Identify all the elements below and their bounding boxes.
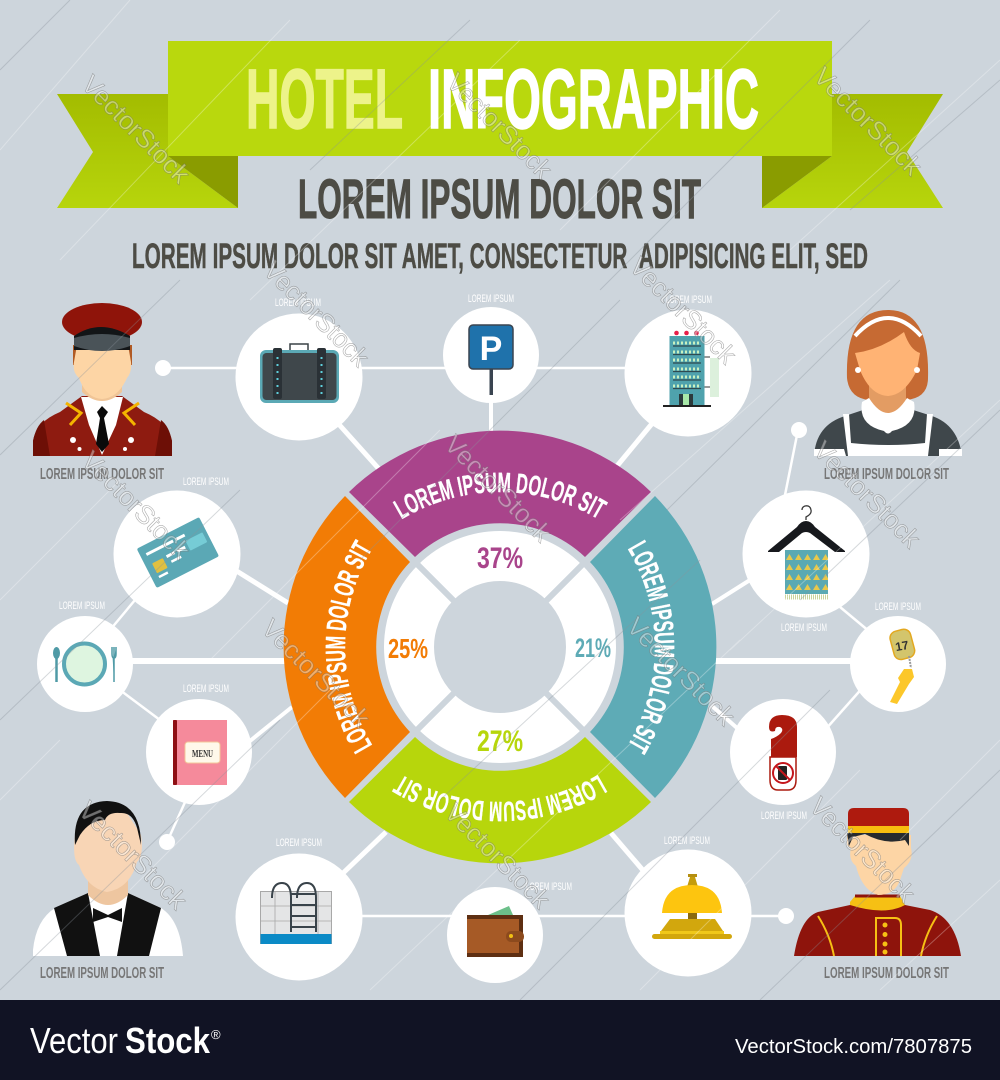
icon circle: pool [236, 854, 362, 980]
ribbon banner [57, 41, 943, 208]
person: bellhop with peaked cap [33, 303, 172, 456]
icon circle: key: 17 [894, 638, 910, 654]
arc label: orange: LOREM IPSUM DOLOR SIT [326, 538, 372, 754]
small icon labels: LOREM IPSUM [59, 600, 105, 612]
VectorStock watermarks [73, 61, 929, 916]
VectorStock watermarks: VectorStock [441, 67, 559, 185]
VectorStock watermarks: VectorStock [439, 429, 558, 549]
person: waiter [33, 801, 183, 956]
icon circle: plate [37, 616, 133, 712]
segment: teal [590, 496, 716, 798]
small icon labels: LOREM IPSUM [468, 293, 514, 305]
icon circle: menu book: MENU [192, 748, 213, 760]
icon circle: bell [624, 850, 752, 976]
icon circle: door hanger [730, 699, 836, 805]
VectorStock watermarks: VectorStock [621, 611, 742, 732]
icon circle: hotel building [624, 310, 752, 436]
icon circle: suitcase [236, 314, 362, 440]
icon circle: parking: P [480, 330, 502, 368]
VectorStock watermarks: VectorStock [439, 797, 557, 915]
footer image id: VectorStock.com/7807875 [735, 1036, 972, 1058]
subtitle: LOREM IPSUM DOLOR SIT [298, 167, 701, 230]
footer bar [0, 1000, 1000, 1080]
icon circle: menu book [146, 699, 252, 805]
arc label: purple: LOREM IPSUM DOLOR SIT [392, 472, 608, 520]
small icon labels: LOREM IPSUM [875, 601, 921, 613]
footer logo: Vector [30, 1020, 118, 1061]
icon circle: key [850, 616, 946, 712]
VectorStock watermarks: VectorStock [76, 69, 197, 190]
VectorStock watermarks: VectorStock [624, 251, 743, 371]
footer logo: Stock [125, 1020, 211, 1061]
person: bellboy [794, 808, 961, 956]
small icon labels: LOREM IPSUM [761, 810, 807, 822]
segment: orange [284, 496, 410, 798]
VectorStock watermarks: VectorStock [256, 613, 377, 734]
small icon labels: LOREM IPSUM [664, 835, 710, 847]
connector end dots [155, 360, 807, 924]
VectorStock watermarks: VectorStock [258, 255, 376, 373]
small icon labels: LOREM IPSUM [526, 881, 572, 893]
small icon labels: LOREM IPSUM [781, 622, 827, 634]
value 25%: 25% [388, 633, 428, 664]
VectorStock watermarks: VectorStock [808, 61, 929, 182]
icon circle: credit card [114, 490, 240, 618]
title: INFOGRAPHIC [428, 52, 759, 146]
icon circle: hanger and towel [742, 490, 870, 618]
icon circle: wallet [447, 887, 543, 983]
value 37%: 37% [477, 542, 523, 575]
VectorStock watermarks: VectorStock [808, 435, 927, 555]
person: maid [814, 310, 962, 456]
icon circle: parking [443, 307, 539, 403]
connector lines [110, 368, 870, 916]
value 27%: 27% [477, 725, 523, 758]
VectorStock watermarks: VectorStock [73, 795, 194, 916]
segment: purple [349, 431, 651, 557]
person label: LOREM IPSUM DOLOR SIT [40, 466, 164, 483]
footer logo: ® [211, 1027, 221, 1042]
small icon labels [59, 293, 921, 893]
small icon labels: LOREM IPSUM [666, 294, 712, 306]
person label: LOREM IPSUM DOLOR SIT [40, 965, 164, 982]
small icon labels: LOREM IPSUM [275, 297, 321, 309]
VectorStock watermarks: VectorStock [804, 791, 922, 909]
small icon labels: LOREM IPSUM [276, 837, 322, 849]
inner white ring [409, 556, 591, 738]
small icon labels: LOREM IPSUM [183, 476, 229, 488]
VectorStock watermarks: VectorStock [76, 445, 197, 566]
circular chart [284, 430, 716, 864]
segment: green [349, 737, 651, 863]
arc label: green: LOREM IPSUM DOLOR SIT [392, 774, 608, 822]
small icon labels: LOREM IPSUM [183, 683, 229, 695]
arc label: teal: LOREM IPSUM DOLOR SIT [628, 540, 674, 756]
title: HOTEL [246, 52, 403, 146]
value 21%: 21% [575, 633, 611, 663]
